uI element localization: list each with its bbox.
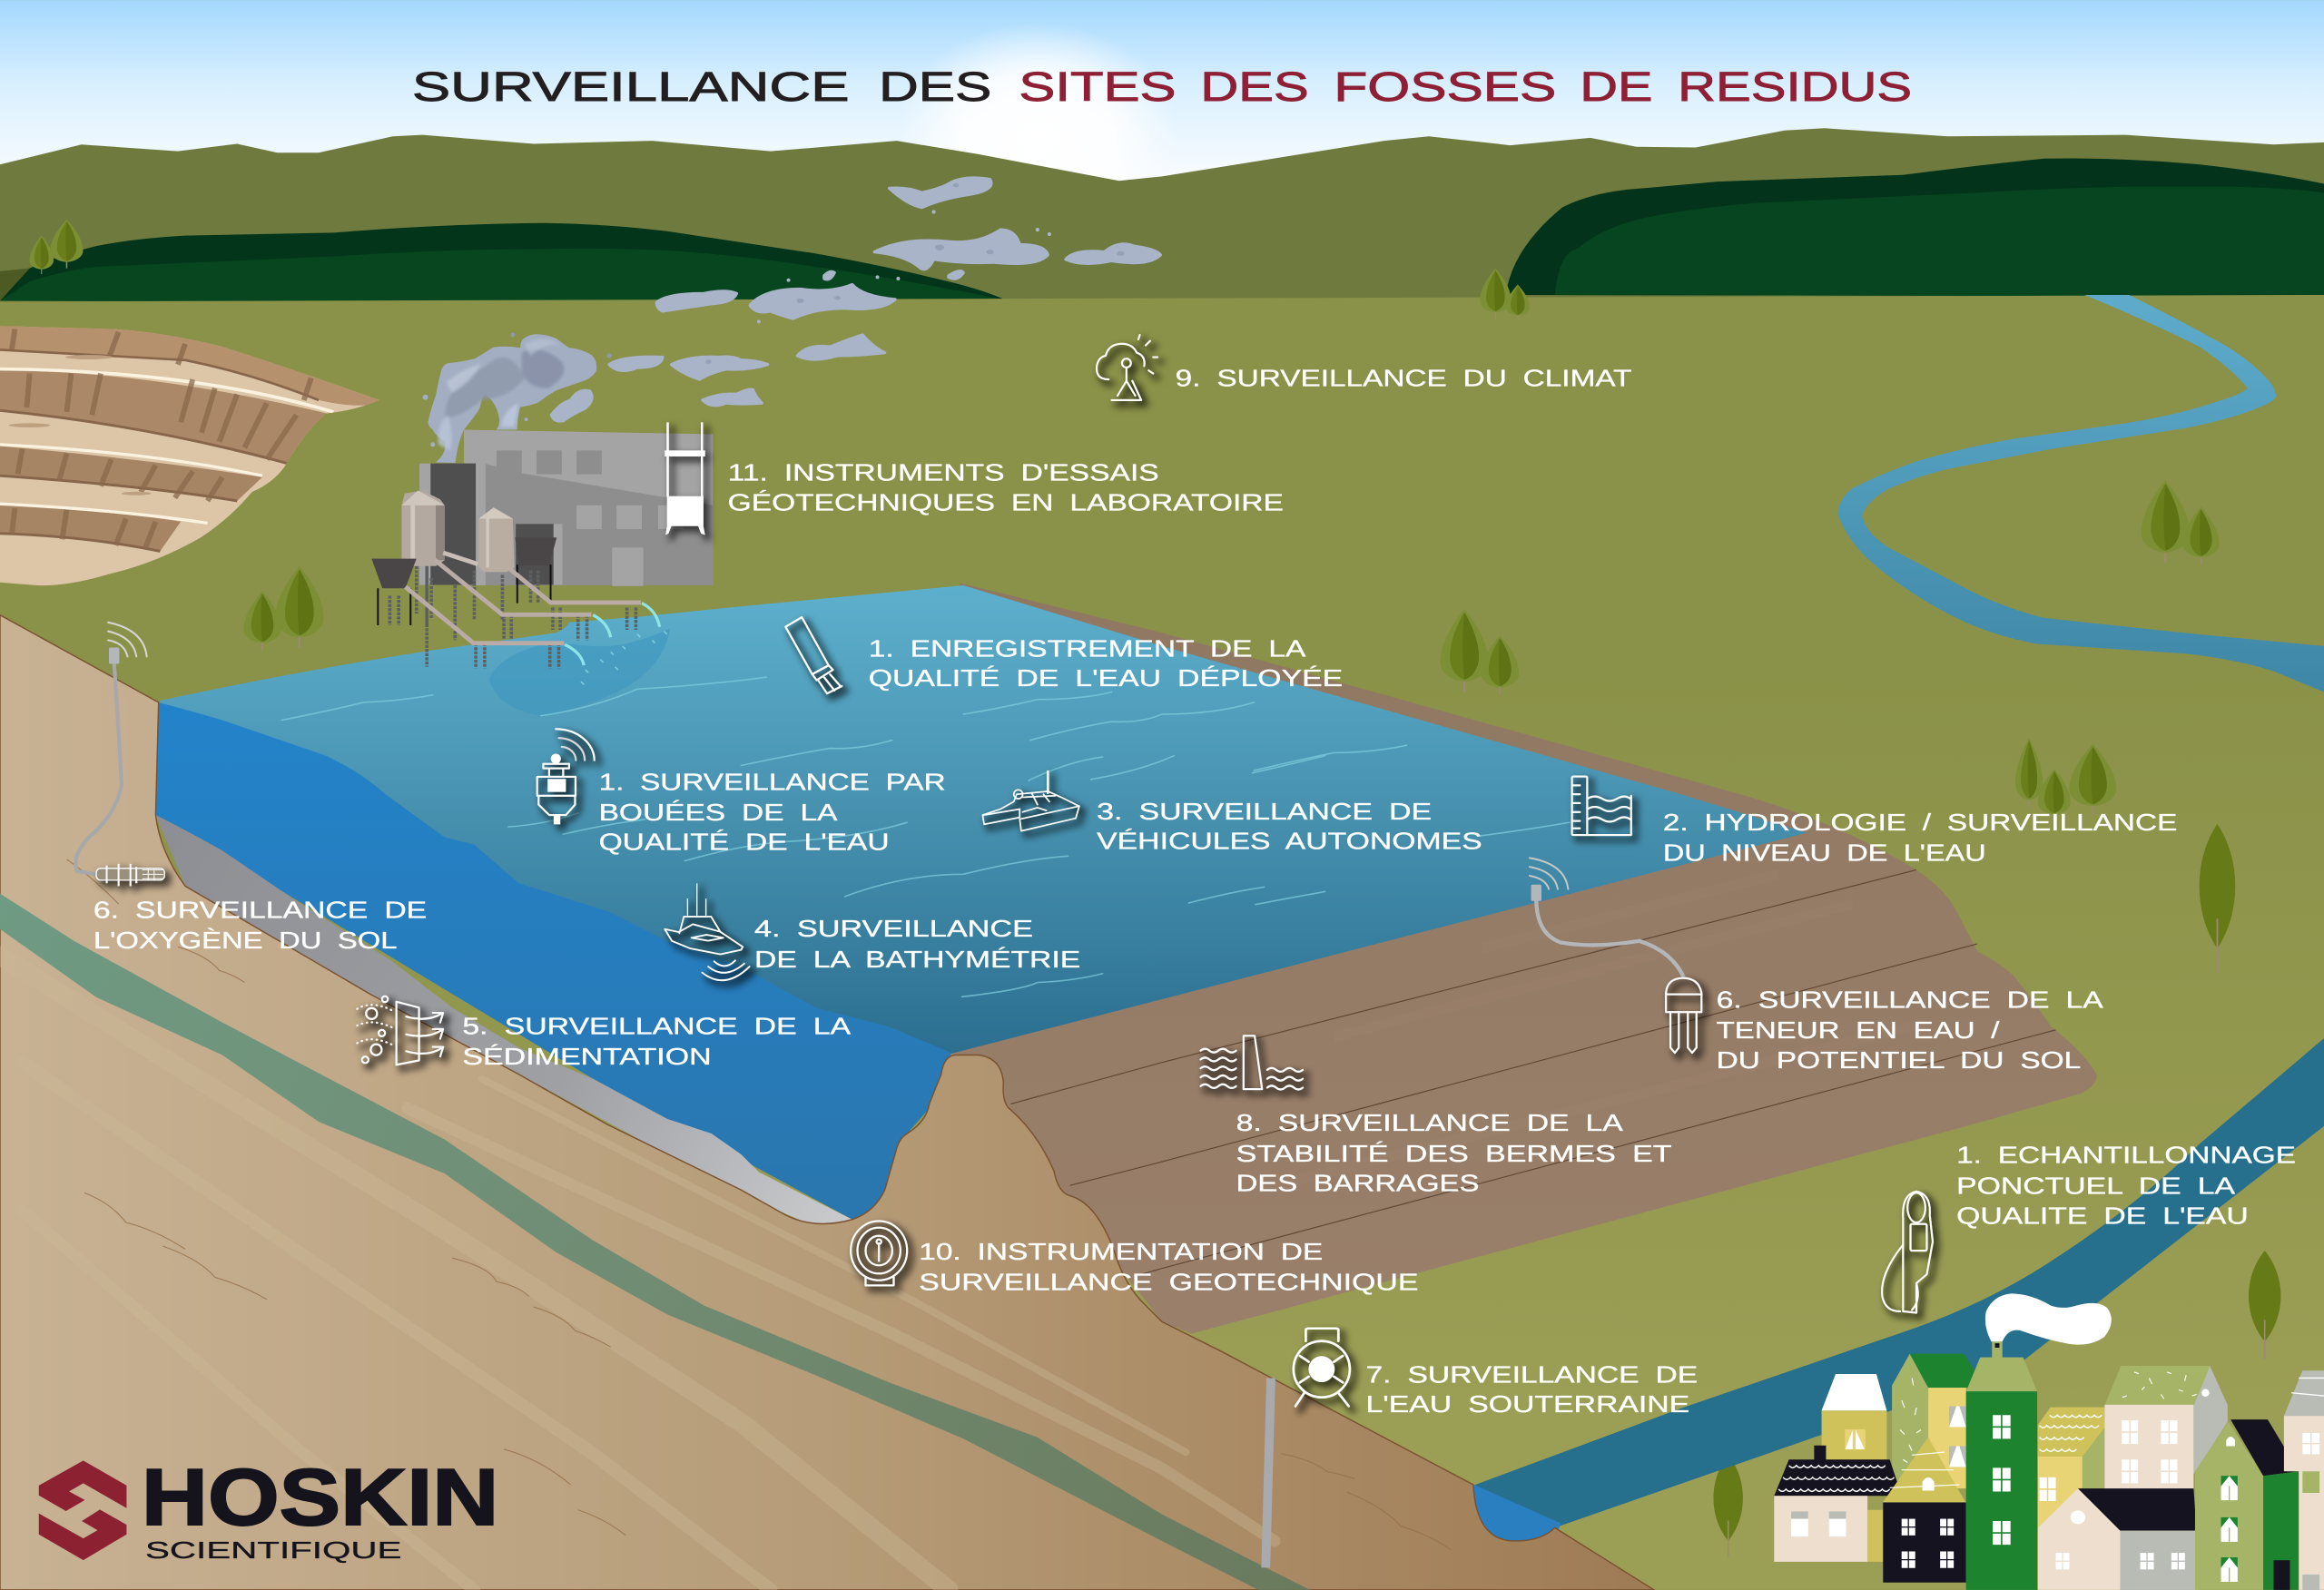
groundwater well pipe xyxy=(1261,1378,1275,1567)
logo wordmark: HOSKIN xyxy=(142,1452,498,1542)
icon: soil moisture sensor xyxy=(1666,978,1701,1053)
house: green roof xyxy=(1892,1354,1975,1488)
soil strata stripes xyxy=(0,956,1275,1590)
label: soil moisture xyxy=(1717,987,2103,1074)
title: DE xyxy=(1580,64,1652,110)
house: dark with yellow gable xyxy=(1883,1438,1966,1583)
label: groundwater: 7. SURVEILLANCE DE xyxy=(1365,1362,1698,1388)
logo mark xyxy=(39,1460,126,1560)
label: lab instruments: GÉOTECHNIQUES EN LABORATOIRE xyxy=(728,490,1284,516)
label: grab sampling: 1. ECHANTILLONNAGE xyxy=(1956,1143,2296,1169)
label: autonomous vehicles: 3. SURVEILLANCE DE xyxy=(1097,800,1432,825)
label: deployed water quality: QUALITÉ DE L'EAU DÉPLOYÉE xyxy=(869,665,1343,692)
label: geotechnical monitoring: SURVEILLANCE GEOTECHNIQUE xyxy=(919,1271,1418,1296)
label: grab sampling: PONCTUEL DE LA xyxy=(1956,1174,2235,1200)
darker discharge patch xyxy=(489,628,670,716)
narrow green house xyxy=(2195,1419,2299,1590)
silos, hoppers and pipelines xyxy=(371,490,667,684)
factory building xyxy=(419,430,713,586)
icon: geotechnical gauge xyxy=(851,1221,907,1285)
label: lab instruments: 11. INSTRUMENTS D'ESSAIS xyxy=(728,461,1159,486)
logo: Hoskin Scientifique xyxy=(39,1452,498,1564)
label: bathymetry: 4. SURVEILLANCE xyxy=(754,917,1033,942)
label: hydrology: DU NIVEAU DE L'EAU xyxy=(1663,841,1986,867)
title xyxy=(412,64,1912,110)
logo subtitle: SCIENTIFIQUE xyxy=(145,1536,401,1564)
label: deployed water quality xyxy=(869,636,1343,692)
label: buoys xyxy=(599,770,946,856)
right soil probe cable xyxy=(1530,858,1684,977)
sun glow xyxy=(897,23,1178,244)
icon: monitoring buoy xyxy=(537,729,595,824)
label: autonomous vehicles xyxy=(1097,800,1482,855)
icon: water grab sampling meter xyxy=(1882,1192,1933,1313)
label: soil oxygen xyxy=(94,898,427,954)
title: DES xyxy=(879,64,991,110)
label: deployed water quality: 1. ENREGISTREMENT DE LA xyxy=(869,636,1305,662)
icon: water level gauge xyxy=(1572,777,1631,835)
label: soil oxygen: 6. SURVEILLANCE DE xyxy=(94,898,427,924)
label: berm and dam stability xyxy=(1236,1111,1672,1197)
lower river xyxy=(1473,1038,2324,1527)
label: soil moisture: DU POTENTIEL DU SOL xyxy=(1717,1048,2081,1074)
label: sedimentation: SÉDIMENTATION xyxy=(462,1044,712,1070)
title: RESIDUS xyxy=(1678,64,1912,110)
label: sedimentation: 5. SURVEILLANCE DE LA xyxy=(462,1015,851,1040)
label: buoys: QUALITÉ DE L'EAU xyxy=(599,829,890,856)
label: lab instruments xyxy=(728,461,1284,516)
label: bathymetry: DE LA BATHYMÉTRIE xyxy=(754,947,1080,973)
green stratum xyxy=(0,894,1310,1590)
label: soil moisture: 6. SURVEILLANCE DE LA xyxy=(1717,987,2103,1013)
house: black scalloped roof xyxy=(1774,1446,1897,1562)
house: white roof xyxy=(1822,1374,1886,1461)
icon: bathymetry boat xyxy=(665,884,750,980)
label: buoys: 1. SURVEILLANCE PAR xyxy=(599,770,946,795)
factory smoke plume xyxy=(423,333,612,463)
label: soil oxygen: L'OXYGÈNE DU SOL xyxy=(94,928,398,954)
label: autonomous vehicles: VÉHICULES AUTONOMES xyxy=(1097,829,1482,855)
label: groundwater xyxy=(1365,1362,1698,1418)
title: SITES xyxy=(1019,64,1177,110)
label: groundwater: L'EAU SOUTERRAINE xyxy=(1365,1392,1689,1418)
label: bathymetry xyxy=(754,917,1080,973)
tailings pond water xyxy=(159,585,1807,1054)
dark green hill left xyxy=(0,223,1010,302)
label: geotechnical monitoring: 10. INSTRUMENTATION DE xyxy=(919,1240,1323,1265)
title: DES xyxy=(1200,64,1309,110)
far right house xyxy=(2284,1370,2324,1590)
dam crest and tailings beach xyxy=(951,583,2097,1333)
label: climate: 9. SURVEILLANCE DU CLIMAT xyxy=(1176,366,1632,391)
label: geotechnical monitoring xyxy=(919,1240,1418,1296)
front section of water xyxy=(155,702,951,1220)
label: buoys: BOUÉES DE LA xyxy=(599,800,837,826)
soil cracks xyxy=(66,859,1451,1550)
label: berm and dam stability: 8. SURVEILLANCE DE LA xyxy=(1236,1111,1623,1136)
soil cross-section xyxy=(0,615,1654,1590)
label: grab sampling xyxy=(1956,1143,2296,1230)
left soil probe cable xyxy=(75,623,147,874)
sky background xyxy=(0,0,2324,185)
icon: autonomous catamaran xyxy=(982,771,1079,831)
tall cream house xyxy=(2104,1366,2228,1489)
town xyxy=(1774,1293,2324,1590)
label: berm and dam stability: DES BARRAGES xyxy=(1236,1172,1479,1197)
label: berm and dam stability: STABILITÉ DES BERMES ET xyxy=(1236,1141,1672,1167)
label: soil moisture: TENEUR EN EAU / xyxy=(1717,1018,2001,1044)
icon: dam stability xyxy=(1200,1035,1303,1089)
front cream and black roof house xyxy=(2038,1488,2198,1590)
icon: deployed water logger xyxy=(785,617,842,693)
smoke clouds xyxy=(551,178,1160,421)
water ripples xyxy=(281,677,1570,996)
green tower with chimney xyxy=(1966,1293,2112,1590)
label: grab sampling: QUALITE DE L'EAU xyxy=(1956,1204,2249,1230)
distant hills xyxy=(0,128,2324,311)
icon: climate station xyxy=(1097,335,1157,400)
icon: groundwater cable reel xyxy=(1294,1329,1350,1406)
winding river upper right xyxy=(1837,295,2324,692)
icon: laboratory test frame xyxy=(665,422,705,535)
label: sedimentation xyxy=(462,1015,851,1070)
pond xyxy=(1467,1482,1561,1559)
icon: soil oxygen sensor xyxy=(96,864,164,886)
label: hydrology: 2. HYDROLOGIE / SURVEILLANCE xyxy=(1663,810,2177,836)
title: FOSSES xyxy=(1334,64,1556,110)
title: SURVEILLANCE xyxy=(412,64,850,110)
open pit mine xyxy=(0,319,385,593)
label: hydrology xyxy=(1663,810,2177,867)
sediment layer xyxy=(155,815,852,1230)
house: scalloped yellow roof xyxy=(2038,1408,2104,1527)
dark green hill right xyxy=(1506,159,2324,297)
icon: sedimentation xyxy=(357,996,443,1065)
